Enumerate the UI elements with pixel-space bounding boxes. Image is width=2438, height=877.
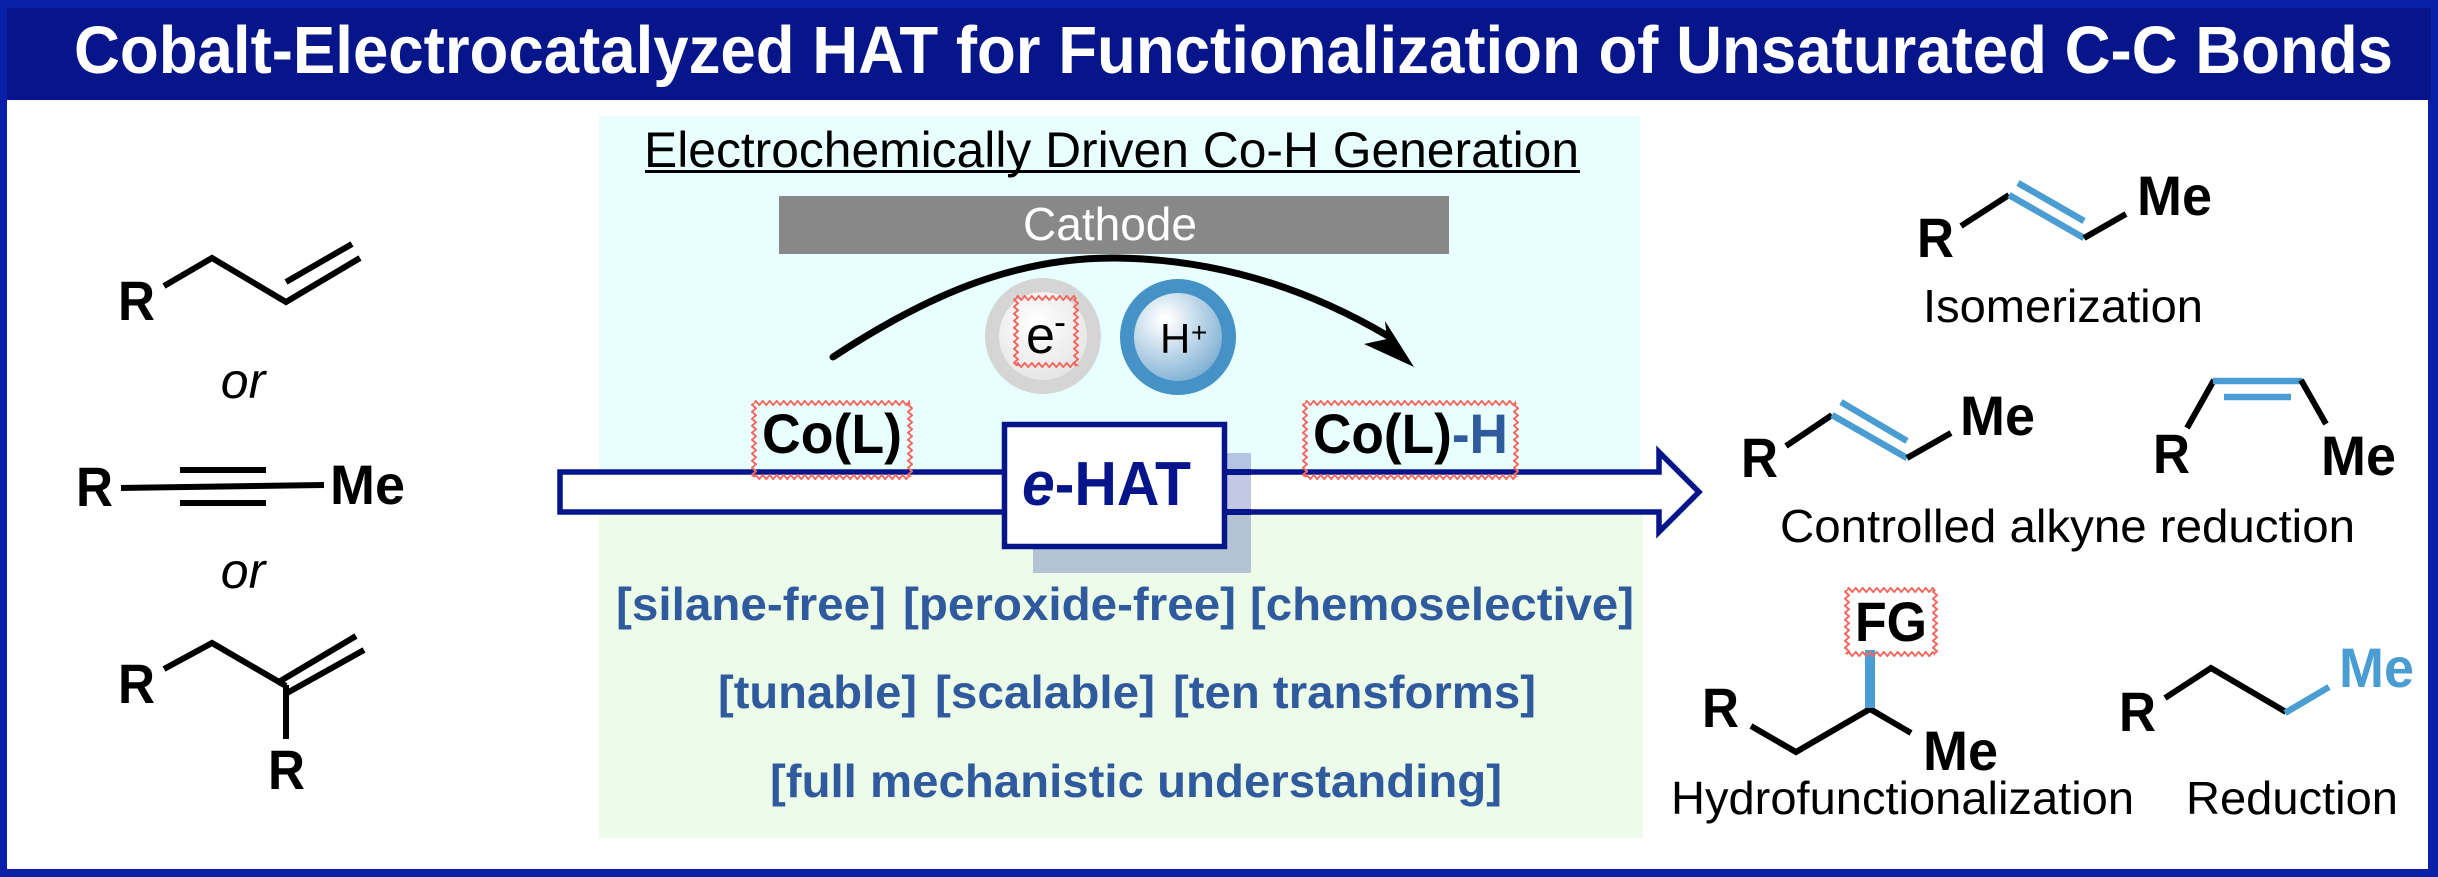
icon: electron: e — [1026, 307, 1055, 365]
product: hydrofunctionalization: Hydrofunctionalization — [1671, 772, 2134, 824]
box shadow — [1033, 453, 1251, 573]
icon: electron — [985, 278, 1101, 394]
label: controlled alkyne reduction: Controlled alkyne reduction — [1780, 500, 2355, 552]
cathode bar — [779, 196, 1449, 254]
product: reduction: R — [2119, 680, 2156, 743]
icon: proton: + — [1191, 317, 1207, 348]
product: isomerization: R — [1917, 206, 1954, 269]
or separator: or — [221, 543, 268, 599]
panel: starting materials — [76, 244, 405, 801]
product: isomerization: Me — [2137, 164, 2212, 227]
feature tags: [peroxide-free] — [903, 578, 1236, 630]
e-HAT box: e-HAT — [1022, 450, 1191, 519]
icon: proton — [1120, 279, 1236, 395]
molecule: 1,1-disubstituted alkene: R — [118, 652, 155, 715]
molecule: terminal alkene: R — [118, 269, 155, 332]
feature tags — [616, 578, 1634, 807]
cathode bar: Cathode — [1023, 198, 1197, 250]
curved arrow — [833, 258, 1414, 367]
label: Co(L)-H: Co(L)-H — [1313, 402, 1508, 465]
product: E-alkene — [1741, 384, 2035, 489]
molecule: internal alkyne: R — [76, 455, 113, 518]
product: isomerization: Isomerization — [1923, 280, 2203, 332]
panel: green features background — [599, 513, 1643, 838]
product: hydrofunctionalization: R — [1702, 676, 1739, 739]
product: hydrofunctionalization: FG — [1855, 590, 1927, 653]
product: Z-alkene: R — [2153, 422, 2190, 485]
large process arrow — [560, 452, 1699, 532]
product: E-alkene: Me — [1960, 384, 2035, 447]
feature tags: [chemoselective] — [1250, 578, 1634, 630]
product: reduction — [2119, 636, 2414, 824]
feature tags: [full mechanistic understanding] — [770, 755, 1502, 807]
panel: cyan Co-H generation background — [599, 116, 1640, 513]
product: hydrofunctionalization — [1671, 587, 2134, 824]
molecule: 1,1-disubstituted alkene — [118, 636, 364, 801]
feature tags: [ten transforms] — [1173, 666, 1536, 718]
product: hydrofunctionalization: Me — [1923, 719, 1998, 782]
product: E-alkene: R — [1741, 426, 1778, 489]
or separator: or — [221, 353, 268, 409]
product: reduction: Me — [2339, 636, 2414, 699]
panel: products — [1671, 164, 2414, 824]
product: reduction: Reduction — [2186, 772, 2398, 824]
feature tags: [silane-free] — [616, 578, 886, 630]
molecule: internal alkyne — [76, 453, 405, 518]
icon: proton: H — [1160, 315, 1190, 362]
feature tags: [tunable] — [718, 666, 917, 718]
icon: electron: - — [1054, 301, 1066, 342]
product: isomerization — [1917, 164, 2212, 332]
label: Co(L): Co(L) — [762, 402, 902, 465]
product: Z-alkene — [2153, 380, 2396, 487]
molecule: terminal alkene — [118, 244, 360, 332]
molecule: internal alkyne: Me — [330, 453, 405, 516]
molecule: 1,1-disubstituted alkene: R — [268, 738, 305, 801]
feature tags: [scalable] — [935, 666, 1155, 718]
product: Z-alkene: Me — [2321, 424, 2396, 487]
e-HAT box — [1004, 424, 1224, 546]
heading: Co-H generation: Electrochemically Driven Co-H Generation — [644, 122, 1579, 178]
